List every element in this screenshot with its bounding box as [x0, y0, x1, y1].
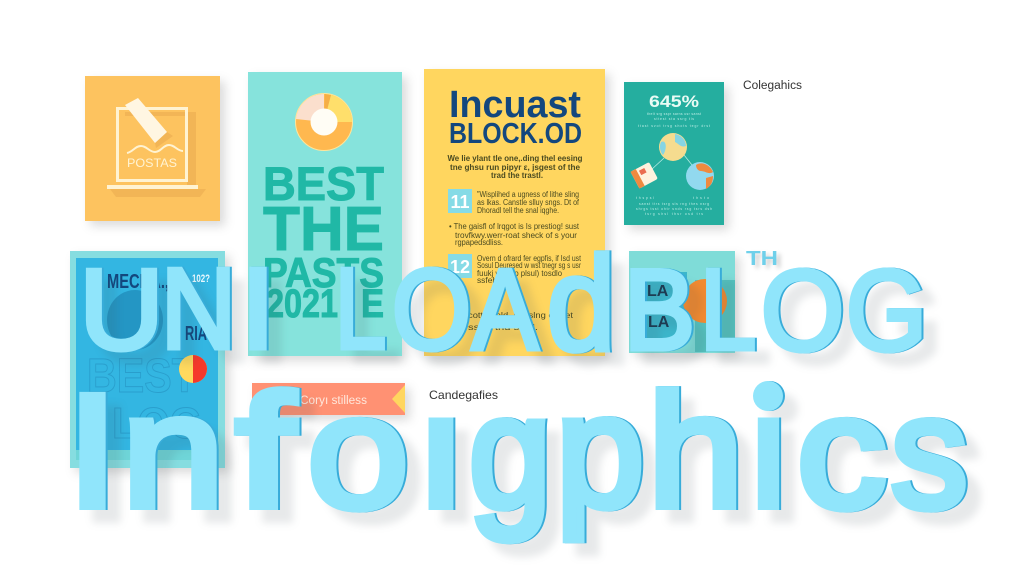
number box 11: 11: [450, 192, 470, 212]
text block: intro: trad the trastl.: [491, 171, 543, 180]
heading: uni loadblog: [80, 230, 927, 379]
panel: green 645% poster: [624, 82, 724, 225]
heading: uni loadblog: O: [392, 247, 471, 374]
stat: 645%: 645%: [649, 92, 699, 111]
text block: intro: tne ghsu run pipyr ε, jsgest of the: [450, 163, 580, 172]
text block: bottom caption: [636, 196, 712, 216]
label: la la: [647, 283, 670, 331]
heading: uni loadblog: I: [240, 246, 276, 373]
outlined words: best log: BEST: [87, 350, 197, 403]
text block: bottom caption: tsrg shsl thsr osd trs: [645, 212, 703, 216]
heading: mecha: MECHA.,: [107, 271, 169, 293]
heading: best the pasts 2021: 2021: [266, 282, 338, 326]
label: th: TH: [746, 248, 778, 270]
label: colegahics: Colegahics: [743, 80, 802, 92]
text block: intro: [448, 154, 582, 180]
label: la la: LA: [647, 283, 669, 300]
heading: uni loadblog: d: [546, 230, 616, 379]
chart: donut: [296, 94, 352, 150]
heading: infographics: I: [67, 361, 118, 540]
text block: bullet: trovfkwy.werr-roat sheck of s your: [455, 231, 577, 240]
heading: incuast block.od: Incuast: [449, 84, 581, 126]
panel: teal best the pasts poster: [248, 72, 402, 356]
text block: item one: [477, 190, 580, 215]
heading: infographics: [67, 361, 968, 541]
heading: infographics: s: [891, 362, 968, 541]
heading: incuast block.od: [449, 84, 582, 150]
heading: uni loadblog: G: [846, 248, 927, 375]
label: la la: LA: [648, 314, 670, 331]
label: 102?: 102?: [192, 273, 210, 285]
text block: bottom caption: sanst ttrs tsrg sls rng thes nsrg: [639, 202, 709, 206]
heading: best the pasts 2021: BEST: [263, 157, 384, 210]
label: candegafies: Candegafies: [429, 388, 498, 402]
text block: bullet: [449, 222, 580, 247]
text block: top caption: sttest sta ssrg tls: [654, 117, 694, 121]
heading: infographics: n: [122, 361, 224, 540]
panel: small teal poster: [629, 251, 735, 353]
panel: blue media poster: [70, 251, 225, 468]
heading: incuast block.od: BLOCK.OD: [449, 118, 582, 150]
text block: item two: fuukj w proo plsul) tosdlo: [477, 269, 563, 278]
panel: orange postas card: [85, 76, 220, 221]
icon: postas box: [107, 98, 206, 197]
heading: infographics: p: [556, 361, 644, 540]
heading: infographics: o: [308, 362, 408, 541]
icon: half pie: [179, 355, 207, 383]
icon: postas box: POSTAS: [127, 158, 177, 170]
outlined words: best log: [87, 350, 202, 448]
text block: bullet: rgpapedsdliss.: [455, 238, 503, 247]
text block: item two: cotth spld. mtsslng ol iset: [468, 311, 574, 320]
heading: uni loadblog: U: [80, 247, 164, 374]
number box 12: [448, 254, 472, 278]
label: ria: RIA: [185, 323, 207, 345]
heading: best the pasts 2021: THE: [263, 195, 384, 264]
heading: infographics: ı: [416, 361, 466, 540]
text block: intro: We lie ylant tle one,.ding thel eesing: [448, 154, 582, 163]
heading: infographics: ı: [747, 361, 790, 540]
heading: uni loadblog: N: [161, 246, 236, 373]
text block: top caption: [638, 112, 710, 128]
heading: infographics: f: [236, 361, 295, 540]
text block: bullet: • The gaisfl of lrqgot is Is prestiog! sust: [449, 222, 580, 231]
heading: uni loadblog: O: [761, 248, 844, 375]
heading: uni loadblog: L: [700, 247, 756, 374]
heading: infographics: g: [469, 362, 551, 541]
icon: orange circle: [683, 279, 727, 323]
heading: best the pasts 2021: E: [361, 282, 384, 326]
text block: bottom caption: thsto: [693, 196, 709, 200]
panel: yellow incuast poster: [424, 69, 605, 356]
heading: infographics: h: [648, 361, 743, 540]
heading: best the pasts 2021: [263, 157, 384, 326]
text block: item one: Dhoradl tell the snal iqghe.: [477, 206, 559, 215]
text block: item two: Sosul Deuresed w wst tnegr sg s usr: [477, 261, 581, 270]
text block: item one: as lkas. Canstle slluy sngs. Dt of: [477, 198, 580, 207]
heading: uni loadblog: B: [624, 247, 695, 374]
text block: item two: ssfeh: [477, 276, 497, 285]
text block: bottom caption: thspsl: [636, 196, 654, 200]
text block: top caption: thelt srg sspr sarns usr sanst: [647, 112, 701, 116]
text block: item two: sshe tnd srsd.: [468, 323, 538, 332]
text block: bottom caption: shrgs tsst ohtr snds rsg tsrs dsh: [636, 207, 712, 211]
text block: item two: Overn d ofrard fer egpfis, if Isd ust: [477, 254, 582, 263]
ribbon: story stilless: [252, 383, 405, 415]
ribbon: story stilless: Coryı stilless: [300, 395, 367, 407]
heading: uni loadblog: L: [335, 246, 386, 373]
text block: item two: [468, 254, 582, 332]
text block: item one: "Wisplihed a ugness of lithe sling: [477, 190, 579, 199]
number box 11: [448, 189, 472, 213]
heading: best the pasts 2021: PASTS: [263, 249, 384, 296]
heading: infographics: c: [797, 362, 886, 541]
number box 12: 12: [450, 257, 470, 277]
outlined words: best log: LOG: [112, 399, 202, 448]
diagram: globes and connectors: [630, 133, 714, 190]
text block: top caption: ttast svot trsg shots tegr drst: [638, 124, 710, 128]
heading: uni loadblog: A: [472, 247, 538, 374]
